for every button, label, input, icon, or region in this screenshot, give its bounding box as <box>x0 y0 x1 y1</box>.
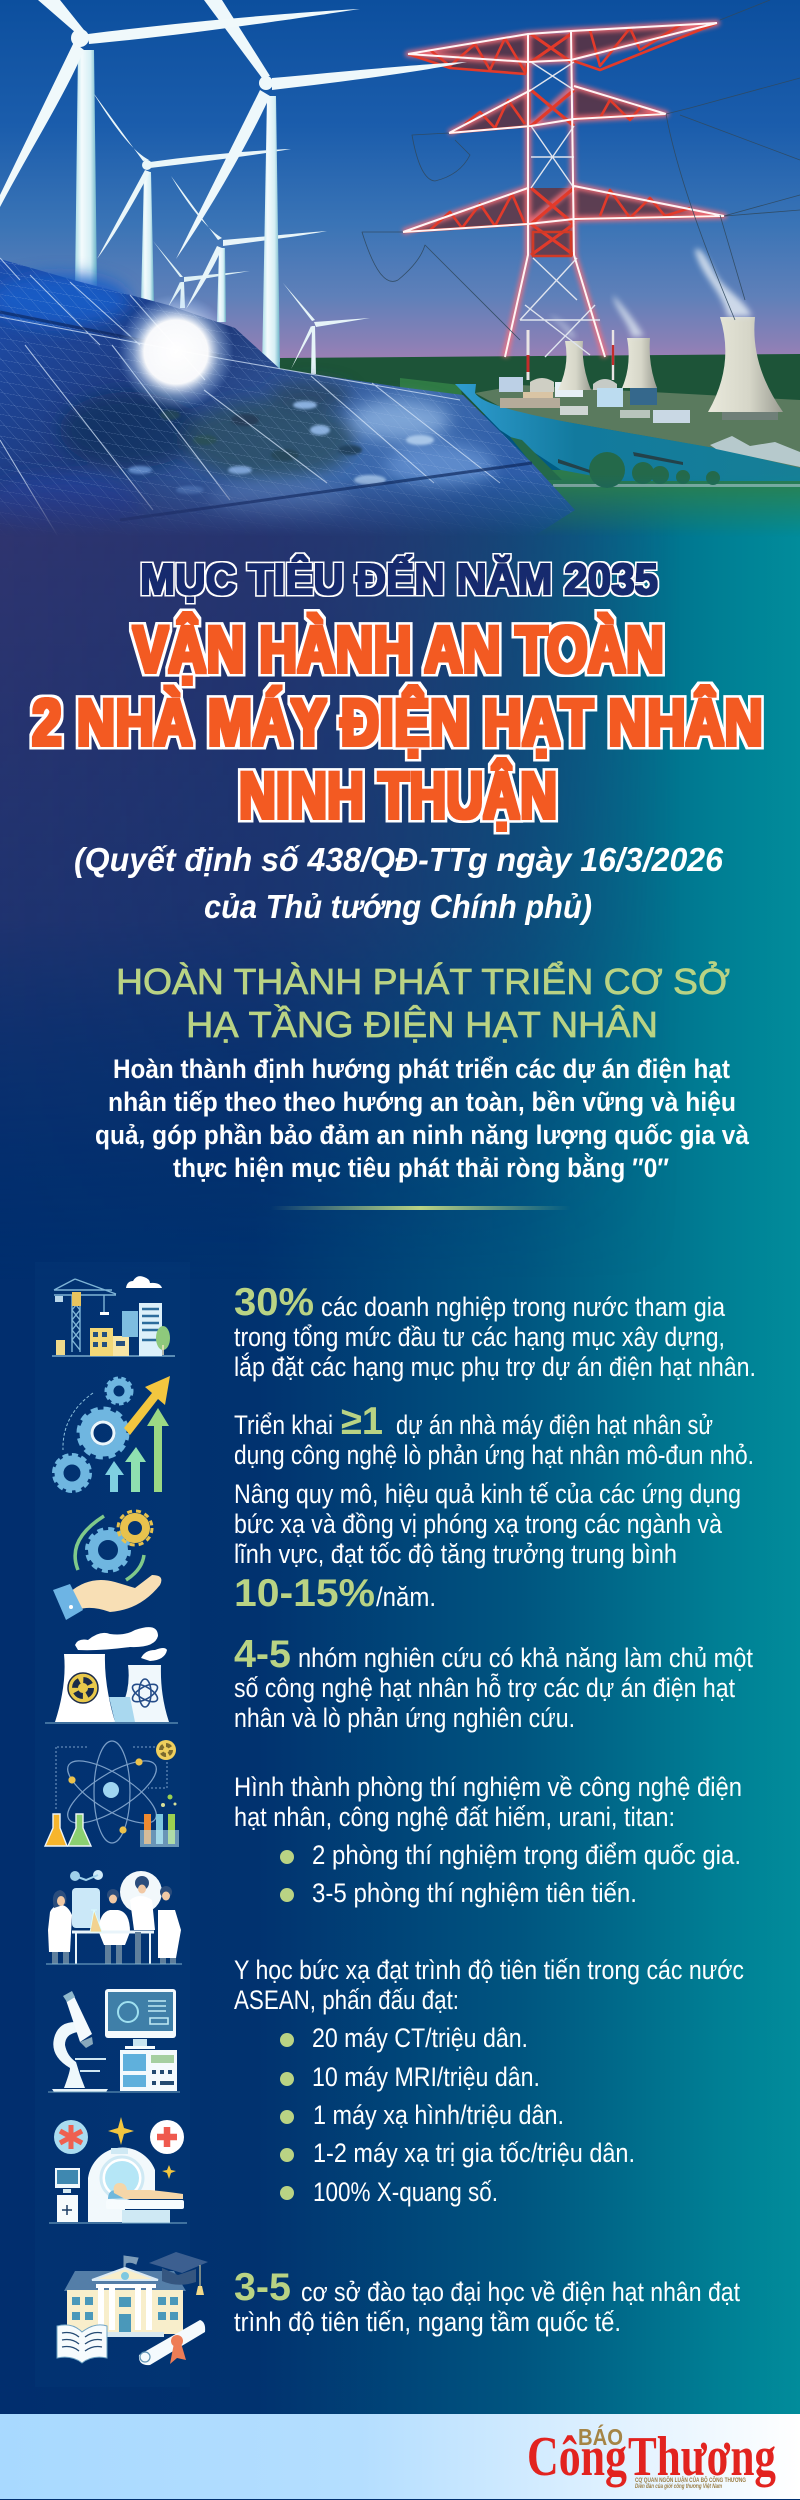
text: radiation medicine list: 1-2 máy xạ trị gia tốc/triệu dân. <box>313 2138 635 2168</box>
text: laboratories list: 2 phòng thí nghiệm trọng điểm quốc gia. <box>312 1840 741 1870</box>
scientists <box>48 1896 181 1958</box>
intro text: quả, góp phần bảo đảm an ninh năng lượng quốc gia và <box>95 1120 750 1150</box>
text: laboratories list: 3-5 phòng thí nghiệm tiên tiến. <box>312 1878 637 1908</box>
text: university training: trình độ tiên tiến, ngang tầm quốc tế. <box>234 2307 621 2337</box>
icon: scientists at a laboratory table <box>46 1870 182 1964</box>
text: university training: 3-5 <box>234 2266 291 2309</box>
barge <box>633 452 683 465</box>
icon: gears and growth arrows <box>54 1376 170 1492</box>
sun glare <box>118 294 234 410</box>
forest horizon <box>280 354 800 420</box>
subtitle decision reference: (Quyết định số 438/QĐ-TTg ngày 16/3/2026 <box>74 841 724 878</box>
icon: construction crane and city <box>52 1276 175 1356</box>
text: university training: cơ sở đào tạo đại học về điện hạt nhân đạt <box>301 2277 740 2307</box>
intro text: thực hiện mục tiêu phát thải ròng bằng ″0″ <box>173 1152 669 1183</box>
turbine 5 <box>153 241 250 308</box>
wind turbines <box>0 0 467 374</box>
gears <box>54 1378 132 1491</box>
text: radiation medicine list: 10 máy MRI/triệu dân. <box>312 2062 540 2092</box>
text: university training <box>234 2266 740 2337</box>
turbine 1 <box>0 0 360 290</box>
logo: Báo Công Thương: Công <box>527 2426 627 2488</box>
icon: university, book and diploma <box>57 2252 208 2365</box>
text: radiation medicine list: 1 máy xạ hình/triệu dân. <box>313 2100 564 2130</box>
section heading: HOÀN THÀNH PHÁT TRIỂN CƠ SỞ <box>116 960 730 1002</box>
logo: Báo Công Thương: BÁO <box>578 2423 623 2450</box>
plant land <box>475 385 800 468</box>
text: 30 percent enterprises: các doanh nghiệp trong nước tham gia <box>321 1292 726 1322</box>
text: small modular reactor project: ≥1 <box>341 1400 383 1443</box>
hero photo: renewable energy and nuclear plant <box>0 0 800 545</box>
turbine 6 <box>283 283 370 374</box>
icon: MRI scanner <box>49 2117 187 2223</box>
text: 30 percent enterprises <box>234 1281 756 1382</box>
turbine 2 <box>176 0 467 372</box>
divider glow <box>270 1206 571 1210</box>
steam <box>695 249 752 317</box>
land and grass <box>548 470 800 531</box>
subtitle decision reference: của Thủ tướng Chính phủ) <box>204 888 592 925</box>
logo: Báo Công Thương <box>527 2423 776 2490</box>
text: small modular reactor project: dự án nhà máy điện hạt nhân sử <box>396 1410 713 1440</box>
title line 1: MỤC TIÊU ĐẾN NĂM 2035 <box>140 554 658 604</box>
text: small modular reactor project <box>234 1400 754 1470</box>
title line 4: NINH THUẬN <box>239 758 557 832</box>
turbine 4 <box>171 176 327 322</box>
text: radiation medicine list: 100% X-quang số. <box>313 2177 498 2207</box>
icon: microscope and monitor <box>48 1989 180 2092</box>
logo: Báo Công Thương: Diễn đàn của giới công thương Việt Nam <box>635 2483 722 2490</box>
intro text <box>95 1054 750 1183</box>
riverside trees <box>510 437 720 488</box>
title line 2: VẬN HÀNH AN TOÀN <box>133 612 664 686</box>
intro text: Hoàn thành định hướng phát triển các dự án điện hạt <box>113 1054 730 1084</box>
text: 30 percent enterprises: 30% <box>234 1281 314 1324</box>
text: research groups: nhân và lò phản ứng nghiên cứu. <box>234 1703 575 1733</box>
section heading <box>116 960 730 1045</box>
intro text: nhân tiếp theo theo hướng an toàn, bền vững và hiệu <box>108 1087 736 1117</box>
reflected speckles <box>128 401 434 494</box>
logo: Báo Công Thương: CƠ QUAN NGÔN LUẬN CỦA BỘ CÔNG THƯƠNG <box>635 2476 746 2484</box>
text: 30 percent enterprises: trong tổng mức đầu tư các hạng mục xây dựng, <box>234 1322 725 1352</box>
title <box>32 554 763 832</box>
text: research groups <box>234 1633 753 1733</box>
text: radiation medicine list: ASEAN, phấn đấu đạt: <box>234 1985 459 2015</box>
river <box>455 384 800 481</box>
text: radiation applications growth: lĩnh vực, đạt tốc độ tăng trưởng trung bình <box>234 1539 677 1569</box>
icon: nuclear cooling towers <box>45 1627 178 1723</box>
solar panels <box>0 258 575 545</box>
panel reflections <box>0 274 495 535</box>
footer band <box>0 2414 800 2499</box>
text: radiation applications growth: 10-15% <box>234 1572 375 1615</box>
gravel piles <box>710 436 800 467</box>
text: laboratories list: hạt nhân, công nghệ đất hiếm, urani, titan: <box>234 1802 675 1832</box>
icon: hand holding gears <box>53 1511 161 1620</box>
pylon arm mesh <box>403 23 724 255</box>
subtitle decision reference <box>74 841 724 925</box>
text: laboratories list: Hình thành phòng thí nghiệm về công nghệ điện <box>234 1772 742 1802</box>
text: radiation applications growth <box>234 1479 741 1615</box>
green arrows <box>147 1408 169 1492</box>
road and grass <box>553 484 800 487</box>
text: radiation applications growth: bức xạ và đồng vị phóng xạ trong các ngành và <box>234 1509 723 1539</box>
text: radiation medicine list <box>234 1955 744 2207</box>
text: laboratories list <box>234 1772 742 1908</box>
text: small modular reactor project: Triển khai <box>234 1410 333 1440</box>
text: radiation applications growth: /năm. <box>376 1582 436 1612</box>
section heading: HẠ TẦNG ĐIỆN HẠT NHÂN <box>186 1004 658 1045</box>
nuclear plant buildings <box>499 330 690 423</box>
turbine 3 <box>92 91 291 305</box>
background panel <box>0 415 800 2414</box>
transmission pylon <box>362 0 800 357</box>
yellow arrow <box>124 1376 170 1435</box>
cooling towers <box>550 249 783 420</box>
icon: atom and laboratory flasks <box>45 1740 179 1847</box>
text: research groups: 4-5 <box>234 1633 291 1676</box>
icon column backdrop <box>35 1262 190 2387</box>
text: radiation medicine list: 20 máy CT/triệu dân. <box>312 2023 528 2053</box>
